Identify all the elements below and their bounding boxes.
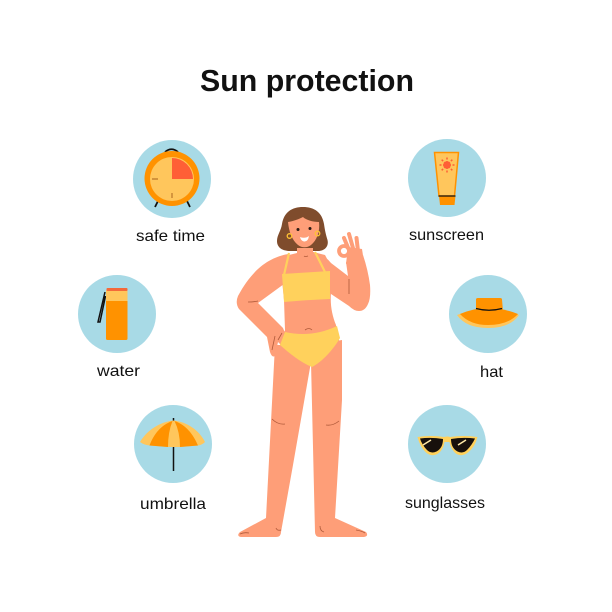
title: Sun protection — [200, 63, 414, 98]
hat band — [476, 308, 502, 310]
label: hat: hat — [480, 364, 504, 381]
body lines — [248, 256, 349, 350]
umbrella canopy light — [140, 420, 205, 447]
tube line — [438, 195, 456, 197]
icon group: safe time — [133, 140, 211, 218]
label: safe time: safe time — [136, 228, 205, 245]
clock ticks — [152, 179, 172, 198]
bottle top — [106, 290, 128, 301]
right arm — [313, 252, 370, 311]
icon group: sunglasses — [408, 405, 486, 483]
umbrella canopy orange panels — [150, 421, 198, 447]
torso — [280, 248, 340, 345]
hat crown — [476, 298, 503, 311]
left lens — [420, 438, 443, 452]
clock face — [150, 157, 194, 201]
icon group: water — [78, 275, 156, 353]
bottle cap — [106, 288, 128, 291]
clock body — [144, 151, 200, 206]
left arm — [237, 254, 288, 356]
figure: woman in bikini — [237, 207, 370, 537]
label: sunglasses: sunglasses — [405, 495, 485, 512]
earrings — [287, 234, 292, 238]
eyes — [296, 228, 300, 231]
frame — [418, 436, 478, 455]
bikini bottom — [280, 326, 340, 367]
label: sunscreen: sunscreen — [409, 227, 484, 244]
bikini straps — [284, 252, 325, 275]
label: water: water — [96, 363, 141, 380]
hand: ring and palm — [339, 234, 364, 264]
hat brim — [460, 308, 518, 325]
left leg — [238, 345, 311, 537]
umbrella pole — [172, 418, 174, 471]
hair — [277, 207, 328, 251]
clock quarter — [172, 158, 193, 179]
lens glare — [423, 440, 466, 445]
icon group: hat — [449, 275, 527, 353]
bottle body — [106, 300, 128, 340]
face — [288, 217, 319, 247]
knee and foot lines — [240, 419, 365, 534]
right leg — [311, 340, 367, 537]
fingers — [344, 234, 358, 251]
tube cap — [439, 196, 456, 205]
bikini top — [282, 271, 330, 302]
hat brim rim — [457, 309, 519, 328]
tube — [434, 152, 458, 196]
bottle strap — [98, 292, 106, 322]
clock legs — [155, 201, 190, 207]
sun symbol — [440, 158, 454, 172]
right lens — [451, 438, 475, 452]
label: umbrella: umbrella — [140, 496, 206, 513]
clock handle — [165, 149, 178, 152]
mouth — [300, 236, 309, 242]
icon group: umbrella — [134, 405, 212, 483]
icon group: sunscreen — [408, 139, 486, 217]
